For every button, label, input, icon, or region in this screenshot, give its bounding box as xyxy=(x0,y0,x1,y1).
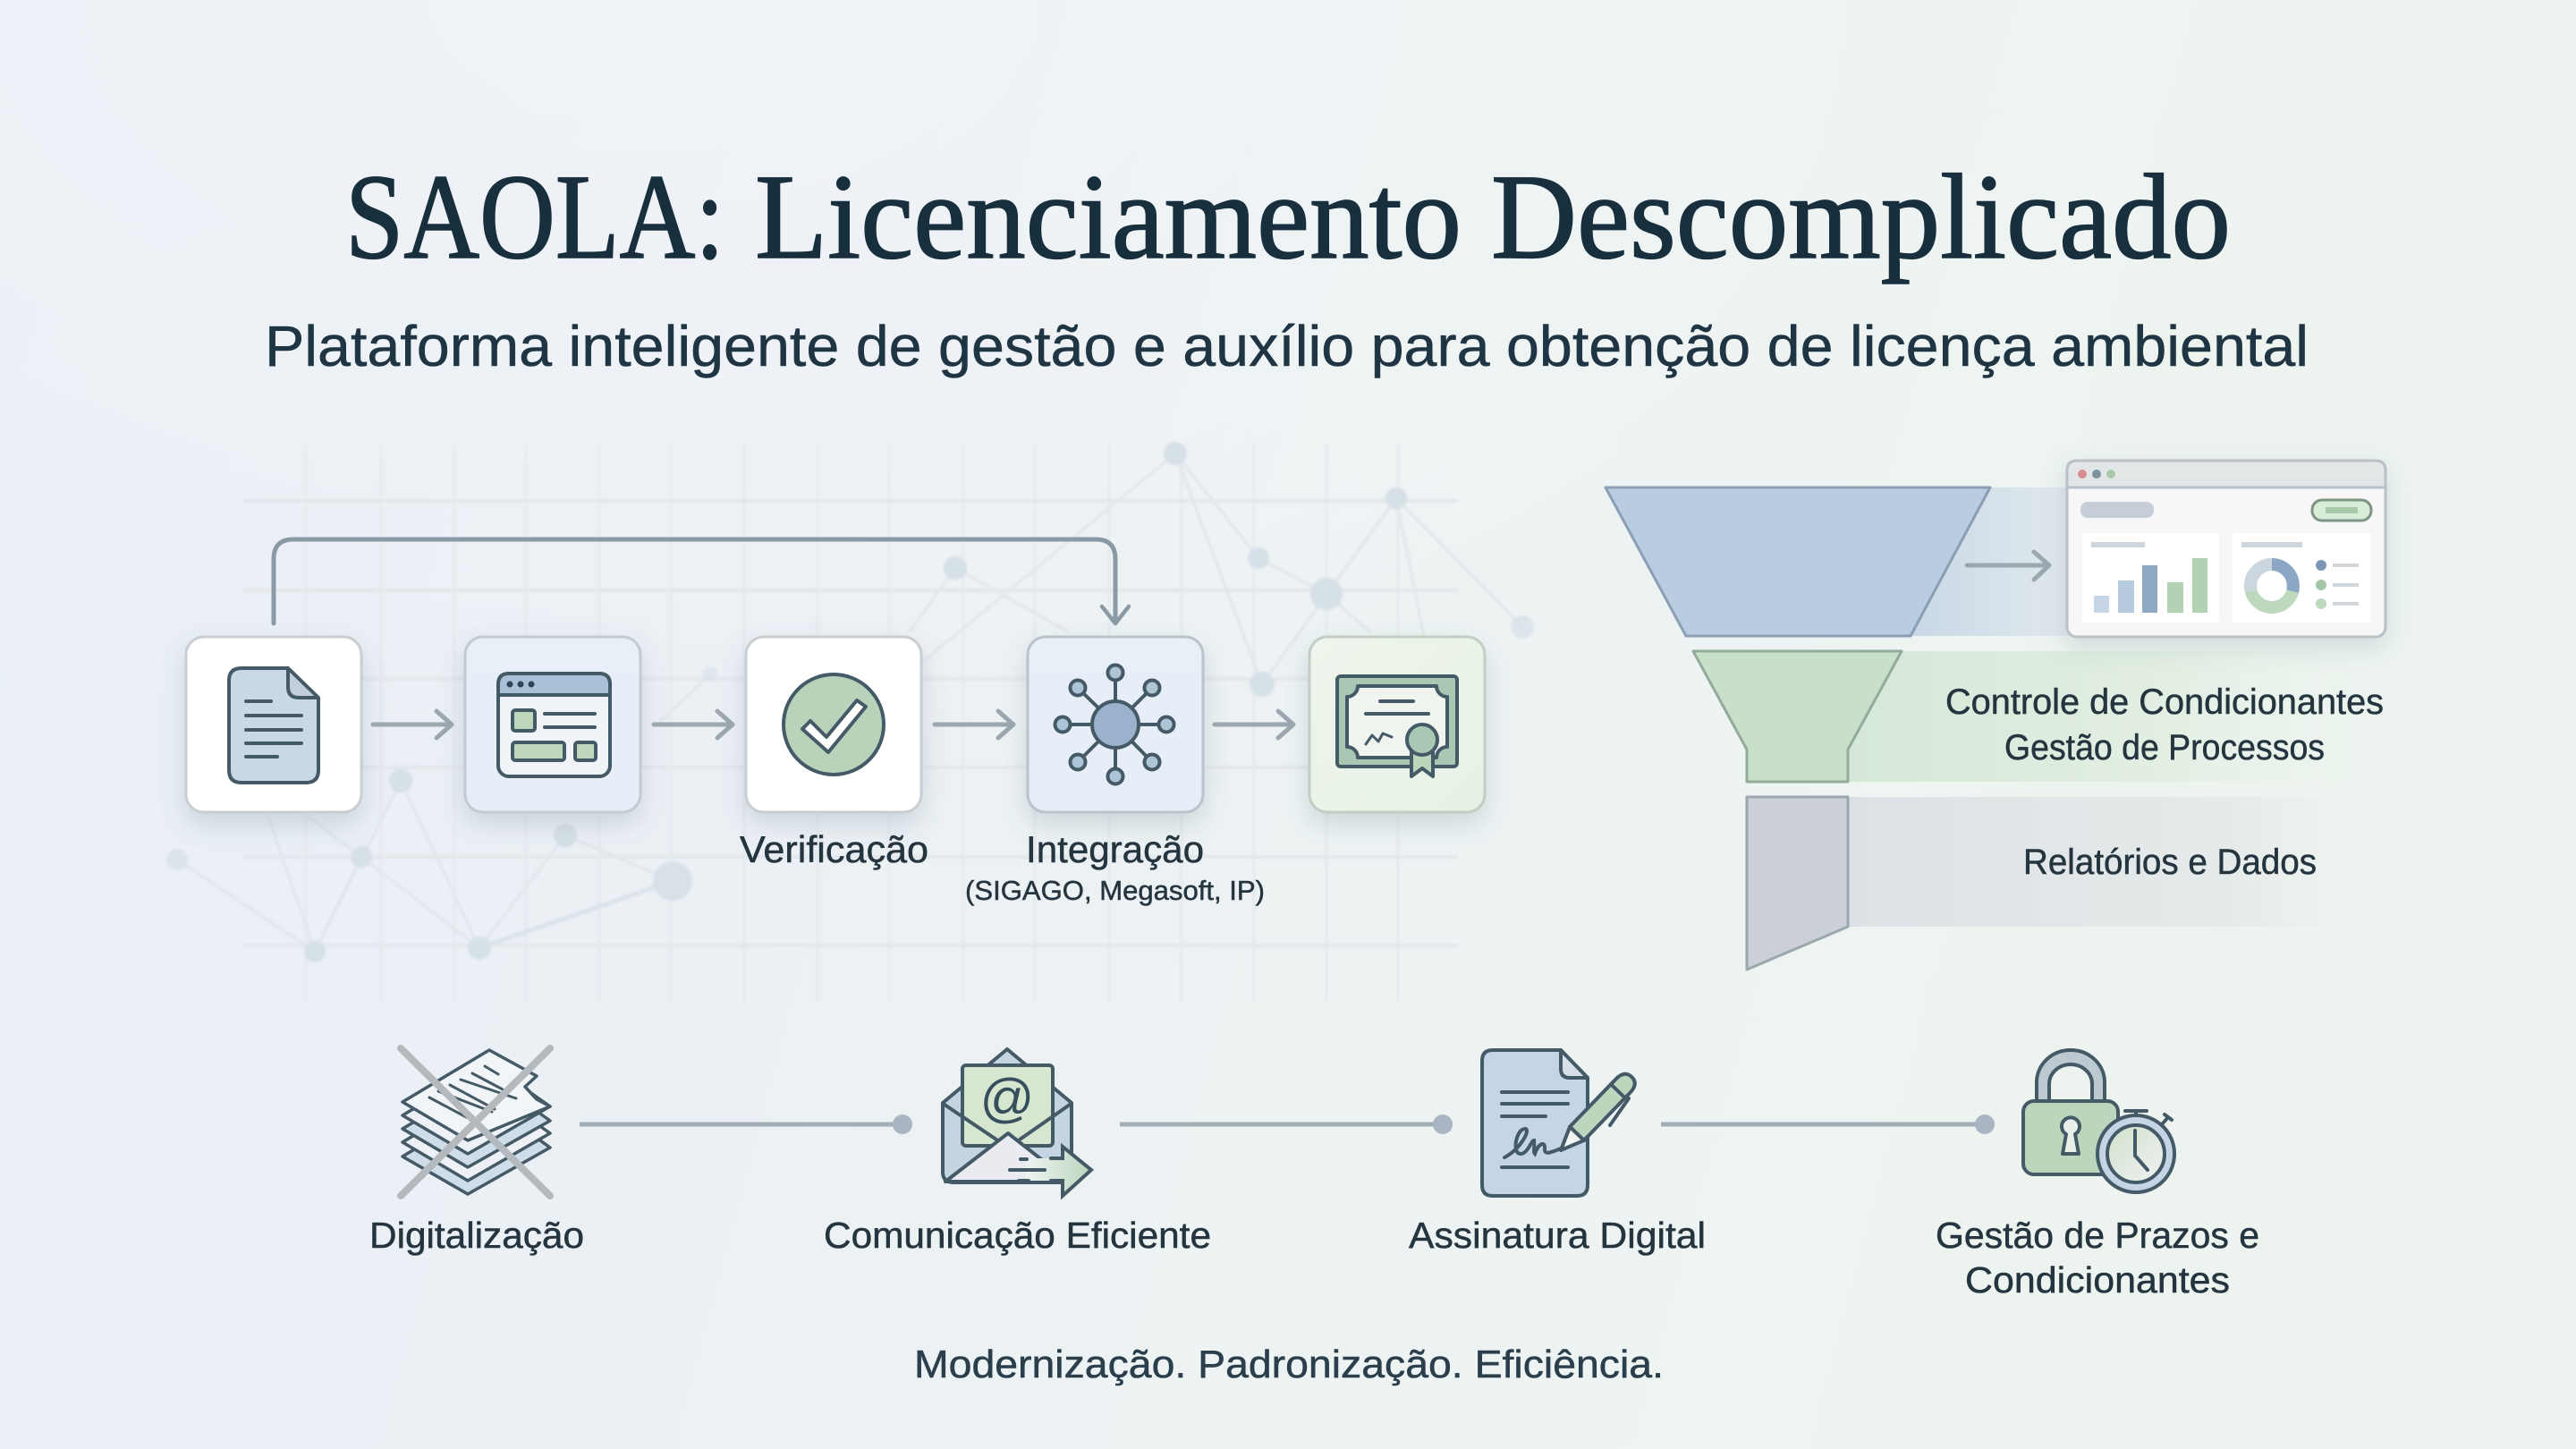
step 5: license card xyxy=(1309,637,1485,812)
icon: email xyxy=(943,1049,1091,1196)
label: Gestão de Prazos e Condicionantes: Condicionantes xyxy=(1965,1259,2230,1301)
step 4: integration card xyxy=(1028,637,1203,812)
funnel band: blue xyxy=(1911,487,2084,636)
arrow xyxy=(935,711,1013,738)
icon: web form xyxy=(498,674,610,776)
donut chart panel xyxy=(2233,533,2370,623)
funnel band: grey xyxy=(1848,797,2388,927)
label: Assinatura Digital: Assinatura Digital xyxy=(1409,1215,1706,1256)
title: SAOLA: xyxy=(345,150,724,284)
label: Digitalização: Digitalização xyxy=(369,1215,584,1256)
arrow xyxy=(373,711,452,738)
title xyxy=(345,150,2231,284)
funnel label: green xyxy=(1945,682,2384,767)
title: Descomplicado xyxy=(1491,150,2231,284)
icon: email: @ xyxy=(980,1068,1034,1128)
dashboard window xyxy=(2067,461,2385,637)
icon: document xyxy=(229,668,318,783)
arrow to dashboard xyxy=(1967,552,2049,580)
icon: paper stack crossed out xyxy=(401,1048,550,1196)
bottom connector lines xyxy=(580,1114,1995,1134)
label: Gestão de Prazos e Condicionantes: Gestão de Prazos e xyxy=(1936,1215,2259,1256)
funnel label: green: Controle de Condicionantes xyxy=(1945,682,2384,722)
label: Integração xyxy=(965,828,1265,906)
background grid and network xyxy=(166,442,1534,1002)
arrow xyxy=(654,711,733,738)
workflow connector arrow xyxy=(274,539,1129,623)
funnel label: green: Gestão de Processos xyxy=(2004,728,2325,767)
icon: check xyxy=(784,674,884,775)
icon: signed document xyxy=(1482,1050,1639,1196)
step 2: form card xyxy=(465,637,640,812)
funnel panel xyxy=(1606,461,2388,970)
label: Integração: (SIGAGO, Megasoft, IP) xyxy=(965,875,1265,906)
icon: hub network xyxy=(1055,665,1174,784)
tagline: Modernização. Padronização. Eficiência. xyxy=(914,1343,1664,1386)
funnel stage: blue xyxy=(1606,487,1990,636)
funnel band: green xyxy=(1848,651,2388,782)
bar chart panel xyxy=(2082,533,2219,623)
title: Licenciamento xyxy=(755,150,1462,284)
subtitle: Plataforma inteligente de gestão e auxílio para obtenção de licença ambiental xyxy=(265,314,2309,378)
funnel stage: grey xyxy=(1747,797,1848,970)
label: Integração: Integração xyxy=(1026,828,1204,870)
label: Gestão de Prazos e Condicionantes xyxy=(1936,1215,2259,1301)
step 3: verification card xyxy=(746,637,921,812)
arrow xyxy=(1215,711,1293,738)
funnel label: grey: Relatórios e Dados xyxy=(2023,843,2317,882)
label: Comunicação Eficiente: Comunicação Eficiente xyxy=(824,1215,1211,1256)
icon: padlock and stopwatch xyxy=(2023,1050,2174,1192)
funnel stage: green xyxy=(1693,651,1902,782)
label: Verificação: Verificação xyxy=(740,828,928,870)
icon: certificate xyxy=(1337,676,1457,776)
step 1: document card xyxy=(186,637,361,812)
